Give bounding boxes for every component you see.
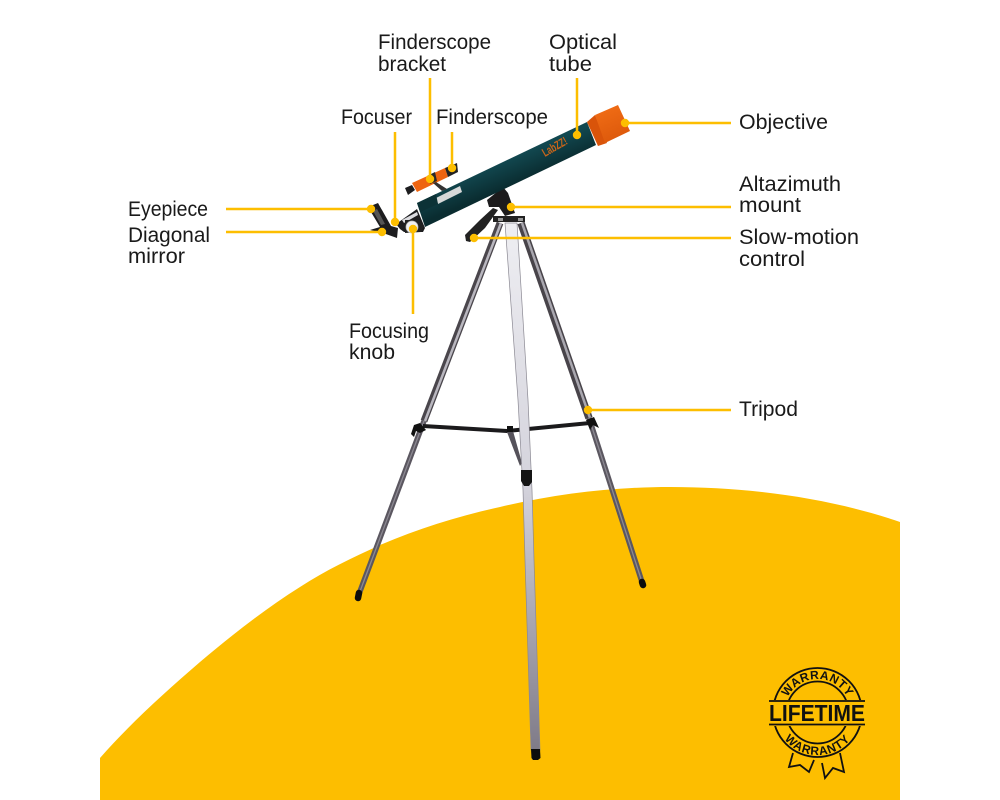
tripod right leg tip <box>642 582 643 585</box>
callout: focuser: Focuser <box>341 106 412 129</box>
callout: eyepiece: Eyepiece <box>128 198 208 221</box>
callout: slow-motion control: Slow-motion <box>739 226 859 249</box>
optical tube <box>417 122 596 227</box>
callout: diagonal mirror: mirror <box>128 245 185 268</box>
tripod left leg <box>359 223 501 594</box>
diagonal mirror and eyepiece <box>368 203 398 238</box>
callout: tripod <box>584 398 798 421</box>
callout: finderscope <box>436 106 548 172</box>
tripod spreader <box>411 417 599 466</box>
badge lifetime text: LIFETIME <box>769 700 865 726</box>
callout: focuser <box>341 106 412 226</box>
badge rings <box>773 668 862 757</box>
callout: objective <box>621 111 828 134</box>
callout: finderscope: Finderscope <box>436 106 548 129</box>
badge ribbons <box>789 753 844 778</box>
objective dew cap <box>587 105 630 146</box>
tripod left leg tip <box>358 593 359 598</box>
callout: finderscope bracket <box>378 31 491 183</box>
callout: eyepiece <box>128 198 375 221</box>
tripod leg clamp <box>521 470 532 486</box>
tripod <box>358 223 643 760</box>
callout: altazimuth mount: Altazimuth <box>739 173 841 196</box>
knob <box>405 220 424 233</box>
callout: slow-motion control: control <box>739 248 805 271</box>
callout: finderscope bracket: bracket <box>378 53 446 76</box>
lifetime warranty badge <box>769 667 865 780</box>
callout: optical tube: Optical <box>549 31 617 54</box>
silver slot on tube <box>436 186 462 204</box>
tripod right leg <box>521 223 642 582</box>
callout: diagonal mirror: Diagonal <box>128 224 210 247</box>
callout: altazimuth mount <box>507 173 841 217</box>
slow-motion control handle <box>465 208 498 242</box>
tripod front leg <box>505 223 540 750</box>
callout: altazimuth mount: mount <box>739 194 801 217</box>
telescope <box>368 105 630 242</box>
callout: optical tube: tube <box>549 53 592 76</box>
callout: objective: Objective <box>739 111 828 134</box>
mount head <box>487 187 525 222</box>
finderscope <box>405 163 458 195</box>
badge bottom warranty text: WARRANTY <box>786 733 848 756</box>
badge band <box>765 700 869 726</box>
brand logo: LabZZ! <box>540 134 570 160</box>
callout: slow-motion control <box>470 226 859 271</box>
yellow hill background <box>100 487 900 800</box>
badge top warranty text: WARRANTY <box>780 670 854 696</box>
callout: focusing knob <box>349 225 429 364</box>
focuser housing <box>396 209 425 232</box>
callout: focusing knob: Focusing <box>349 320 429 343</box>
callout: focusing knob: knob <box>349 341 395 364</box>
callout: optical tube <box>549 31 617 139</box>
callout: diagonal mirror <box>128 224 386 268</box>
callout: tripod: Tripod <box>739 398 798 421</box>
focuser silver drawtube <box>402 212 418 223</box>
tripod front leg tip <box>531 749 540 760</box>
callout: finderscope bracket: Finderscope <box>378 31 491 54</box>
